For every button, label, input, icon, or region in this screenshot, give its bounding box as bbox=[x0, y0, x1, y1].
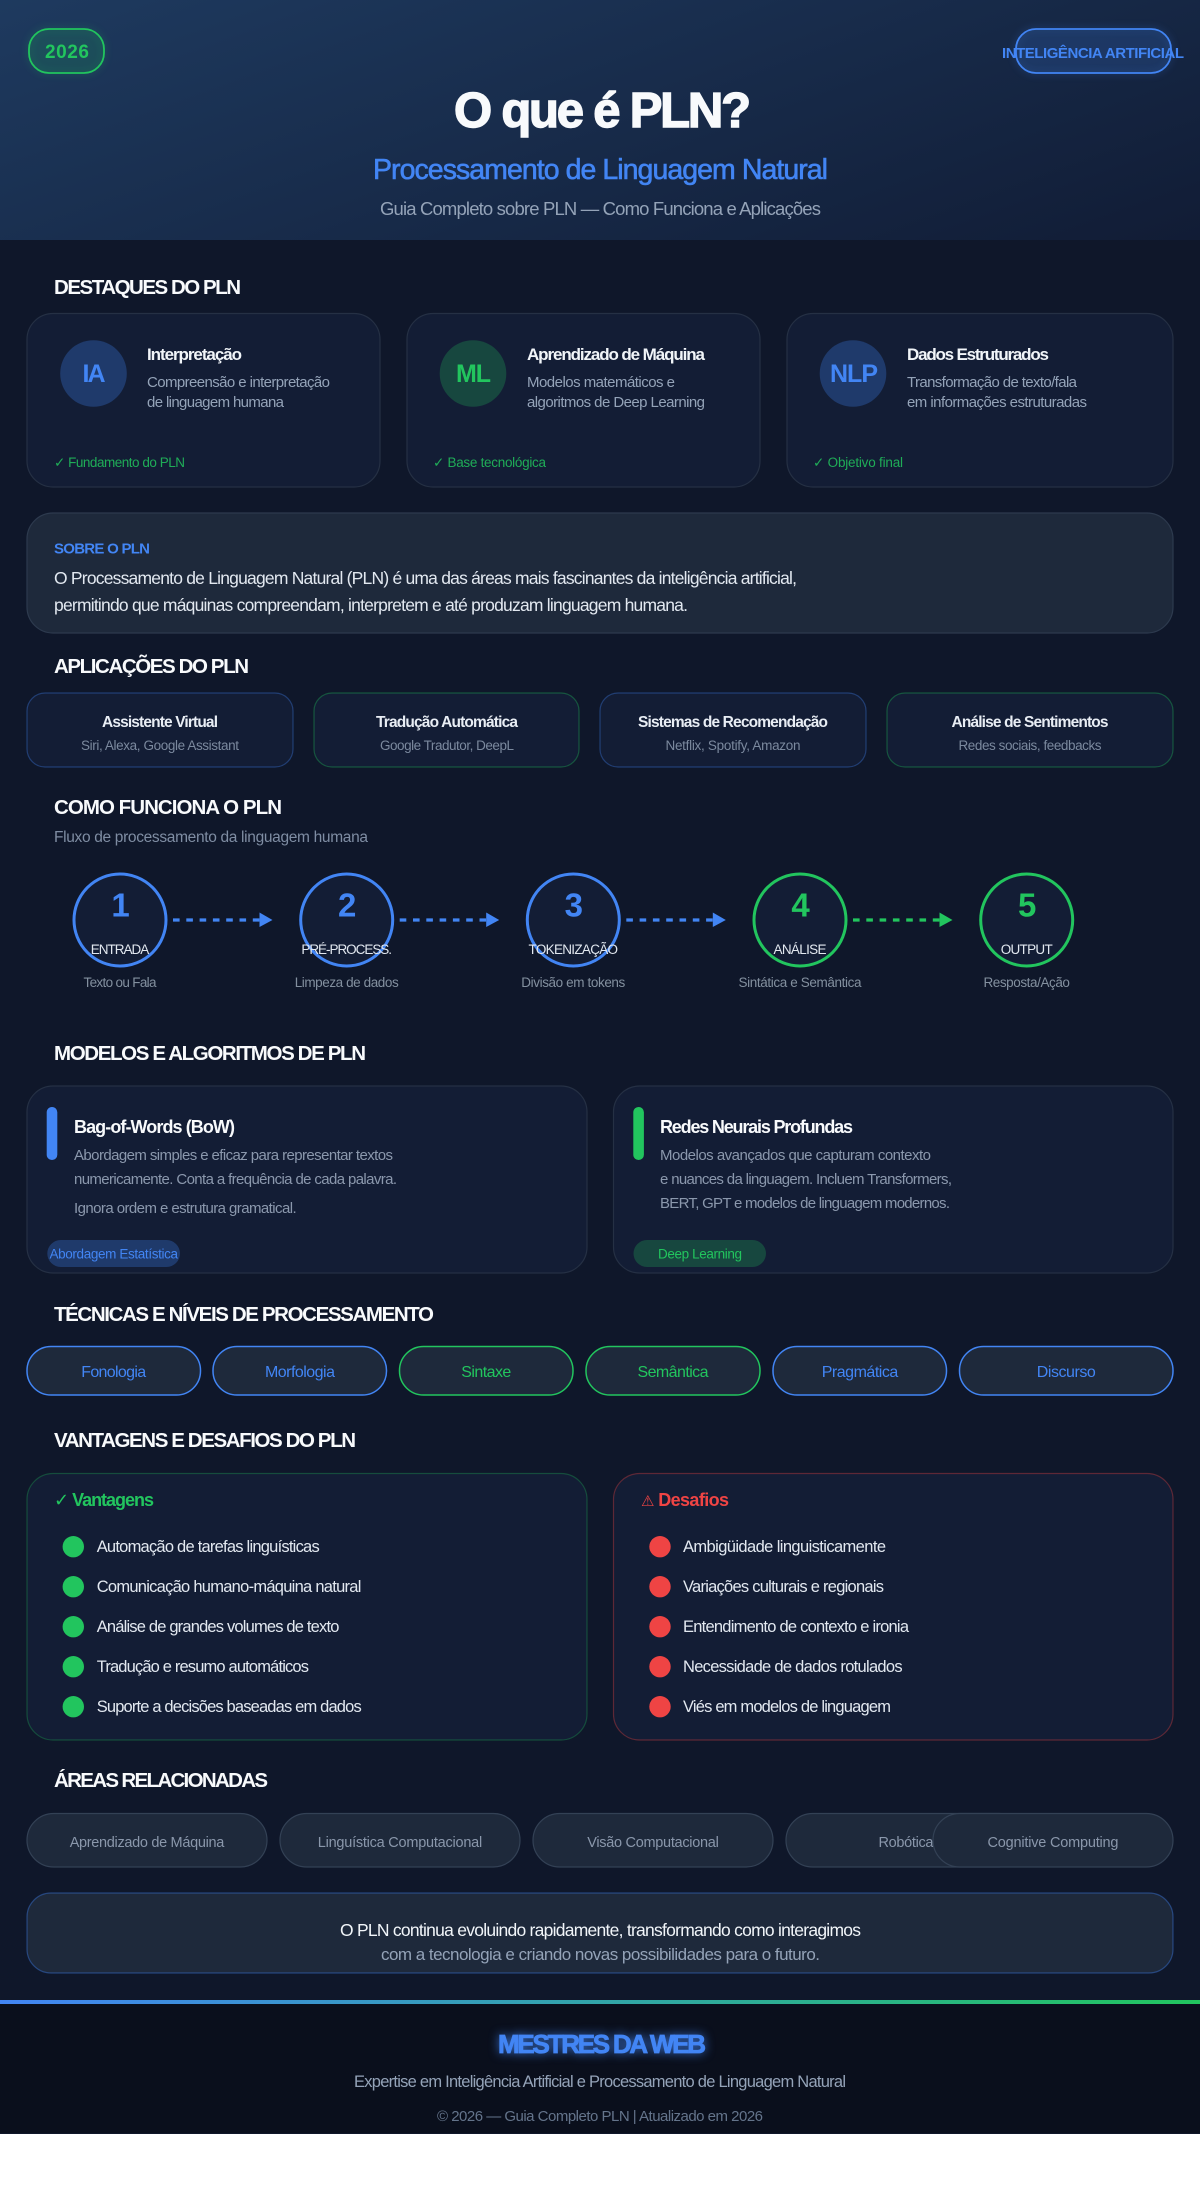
footer copyright: © 2026 — Guia Completo PLN | Atualizado em 2026 bbox=[437, 2108, 763, 2125]
panel: vantagens bbox=[27, 1474, 587, 1740]
footer description: Expertise em Inteligência Artificial e Processamento de Linguagem Natural bbox=[354, 2073, 846, 2091]
card: dados: NLP bbox=[830, 360, 878, 388]
step 1: 1 bbox=[111, 886, 130, 924]
heading: técnicas: TÉCNICAS E NÍVEIS DE PROCESSAMENTO bbox=[54, 1303, 434, 1326]
pill: visão computacional bbox=[533, 1814, 773, 1867]
card: bag-of-words: Ignora ordem e estrutura gramatical. bbox=[74, 1200, 297, 1217]
pill: sintaxe bbox=[400, 1346, 573, 1395]
highlight cards bbox=[27, 314, 1173, 487]
panel: sobre o PLN: O Processamento de Linguagem Natural (PLN) é uma das áreas mais fascinantes da inteligência artificial, bbox=[54, 568, 797, 588]
tagline: Guia Completo sobre PLN — Como Funciona e Aplicações bbox=[380, 198, 821, 219]
category badge bbox=[1002, 29, 1184, 73]
panel: desafios: ⚠ Desafios bbox=[641, 1490, 729, 1510]
pill: cognitive computing: Cognitive Computing bbox=[988, 1835, 1118, 1851]
step 1: ENTRADA bbox=[91, 942, 149, 957]
card: dados: ✓ Objetivo final bbox=[813, 455, 903, 470]
panel: sobre o PLN: SOBRE O PLN bbox=[54, 540, 150, 558]
step 5: 5 bbox=[1018, 886, 1036, 924]
card: sistemas de recomendação: Netflix, Spotify, Amazon bbox=[666, 738, 800, 753]
flow diagram bbox=[74, 874, 1073, 990]
year badge: 2026 bbox=[45, 42, 89, 63]
panel: vantagens: Automação de tarefas linguísticas bbox=[97, 1538, 320, 1556]
panel: vantagens: Comunicação humano-máquina natural bbox=[97, 1578, 361, 1596]
pill: pragmática: Pragmática bbox=[822, 1364, 898, 1381]
arrow 4 bbox=[853, 912, 952, 927]
footer brand: MESTRES DA WEB bbox=[498, 2029, 706, 2059]
panel: desafios: Entendimento de contexto e ironia bbox=[683, 1618, 910, 1636]
step 2: Limpeza de dados bbox=[295, 975, 399, 990]
panel: desafios: Ambigüidade linguisticamente bbox=[683, 1538, 886, 1556]
header bbox=[0, 0, 1200, 240]
card: sistemas de recomendação bbox=[600, 693, 866, 767]
step 3: 3 bbox=[565, 886, 583, 924]
card: redes neurais: Deep Learning bbox=[658, 1246, 742, 1262]
model cards bbox=[27, 1086, 1173, 1273]
step 5: OUTPUT bbox=[1001, 942, 1053, 957]
card: assistente virtual: Assistente Virtual bbox=[102, 714, 218, 731]
panel: sobre o PLN bbox=[27, 513, 1173, 633]
year badge bbox=[29, 29, 104, 73]
pill: cognitive computing bbox=[933, 1814, 1173, 1867]
step 4 bbox=[738, 874, 862, 990]
pill: visão computacional: Visão Computacional bbox=[587, 1835, 719, 1851]
closing callout: O PLN continua evoluindo rapidamente, transformando como interagimos bbox=[340, 1920, 861, 1940]
card: bag-of-words bbox=[27, 1086, 587, 1273]
card: dados: Dados Estruturados bbox=[907, 345, 1049, 364]
heading: como funciona: COMO FUNCIONA O PLN bbox=[54, 796, 282, 819]
pill: morfologia bbox=[213, 1346, 386, 1395]
step 5: Resposta/Ação bbox=[983, 975, 1070, 990]
pill: discurso bbox=[960, 1346, 1173, 1395]
card: interpretação: de linguagem humana bbox=[147, 394, 285, 411]
step 1 bbox=[74, 874, 166, 990]
card: aprendizado bbox=[407, 314, 760, 487]
card: redes neurais: Modelos avançados que capturam contexto bbox=[660, 1147, 931, 1164]
pill: linguística computacional bbox=[280, 1814, 520, 1867]
pill: semântica bbox=[586, 1346, 760, 1395]
arrow 3 bbox=[626, 912, 726, 927]
panel: desafios: Necessidade de dados rotulados bbox=[683, 1658, 903, 1676]
panel: vantagens: Análise de grandes volumes de texto bbox=[97, 1618, 339, 1636]
step 5 bbox=[981, 874, 1073, 990]
card: aprendizado: ✓ Base tecnológica bbox=[433, 455, 546, 470]
card: interpretação: Interpretação bbox=[147, 345, 242, 364]
pill: fonologia bbox=[27, 1346, 200, 1395]
card: dados bbox=[787, 314, 1173, 487]
card: aprendizado: ML bbox=[456, 360, 491, 388]
card: redes neurais bbox=[614, 1086, 1173, 1273]
application cards bbox=[27, 693, 1173, 767]
step 3: TOKENIZAÇÃO bbox=[529, 942, 618, 957]
closing callout bbox=[27, 1893, 1173, 1973]
panel: sobre o PLN: permitindo que máquinas compreendam, interpretem e até produzam linguagem humana. bbox=[54, 595, 688, 615]
closing callout: com a tecnologia e criando novas possibilidades para o futuro. bbox=[381, 1945, 820, 1964]
card: redes neurais: BERT, GPT e modelos de linguagem modernos. bbox=[660, 1195, 950, 1212]
heading: aplicações: APLICAÇÕES DO PLN bbox=[54, 654, 249, 678]
panel: vantagens: Suporte a decisões baseadas em dados bbox=[97, 1698, 362, 1716]
card: sistemas de recomendação: Sistemas de Recomendação bbox=[638, 714, 828, 731]
panel: vantagens: ✓ Vantagens bbox=[54, 1490, 154, 1510]
card: análise de sentimentos bbox=[887, 693, 1173, 767]
flow subtitle: Fluxo de processamento da linguagem humana bbox=[54, 829, 368, 846]
step 4: 4 bbox=[791, 886, 810, 924]
card: redes neurais: e nuances da linguagem. Incluem Transformers, bbox=[660, 1171, 952, 1188]
step 1: Texto ou Fala bbox=[84, 975, 157, 990]
card: aprendizado: Modelos matemáticos e bbox=[527, 374, 675, 391]
step 2: PRÉ-PROCESS. bbox=[301, 942, 392, 957]
heading: vantagens e desafios: VANTAGENS E DESAFIOS DO PLN bbox=[54, 1429, 356, 1452]
card: tradução automática: Tradução Automática bbox=[376, 714, 518, 731]
step 4: ANÁLISE bbox=[774, 942, 826, 957]
pill: pragmática bbox=[773, 1346, 946, 1395]
card: dados: Transformação de texto/fala bbox=[907, 374, 1078, 391]
card: bag-of-words: numericamente. Conta a frequência de cada palavra. bbox=[74, 1171, 397, 1188]
pill: sintaxe: Sintaxe bbox=[461, 1364, 511, 1381]
panel: desafios bbox=[614, 1474, 1173, 1740]
card: interpretação: ✓ Fundamento do PLN bbox=[54, 455, 185, 470]
panel: vantagens: Tradução e resumo automáticos bbox=[97, 1658, 309, 1676]
category badge: INTELIGÊNCIA ARTIFICIAL bbox=[1002, 44, 1184, 62]
technique pills bbox=[27, 1346, 1173, 1395]
pill: robótica: Robótica bbox=[878, 1835, 934, 1851]
pill: robótica bbox=[786, 1814, 1026, 1867]
step 3 bbox=[521, 874, 626, 990]
arrow 2 bbox=[400, 912, 499, 927]
card: interpretação: Compreensão e interpretação bbox=[147, 374, 330, 391]
card: análise de sentimentos: Redes sociais, feedbacks bbox=[958, 738, 1102, 753]
card: análise de sentimentos: Análise de Sentimentos bbox=[952, 714, 1108, 731]
card: dados: em informações estruturadas bbox=[907, 394, 1087, 411]
heading: modelos: MODELOS E ALGORITMOS DE PLN bbox=[54, 1042, 366, 1065]
footer bbox=[0, 2000, 1200, 2133]
card: aprendizado: Aprendizado de Máquina bbox=[527, 345, 706, 364]
panel: desafios: Viés em modelos de linguagem bbox=[683, 1698, 891, 1716]
card: aprendizado: algoritmos de Deep Learning bbox=[527, 394, 705, 411]
panel: desafios: Variações culturais e regionais bbox=[683, 1578, 884, 1596]
card: assistente virtual: Siri, Alexa, Google Assistant bbox=[81, 738, 239, 753]
card: interpretação: IA bbox=[82, 360, 106, 388]
step 2: 2 bbox=[338, 886, 356, 924]
pill: morfologia: Morfologia bbox=[265, 1364, 335, 1381]
heading: destaques: DESTAQUES DO PLN bbox=[54, 276, 241, 299]
card: redes neurais: Redes Neurais Profundas bbox=[660, 1117, 853, 1137]
step 3: Divisão em tokens bbox=[521, 975, 626, 990]
step 4: Sintática e Semântica bbox=[738, 975, 862, 990]
arrow 1 bbox=[173, 912, 272, 927]
heading: áreas relacionadas: ÁREAS RELACIONADAS bbox=[54, 1769, 268, 1792]
card: tradução automática: Google Tradutor, DeepL bbox=[380, 738, 514, 753]
pill: discurso: Discurso bbox=[1037, 1364, 1096, 1381]
subtitle: Processamento de Linguagem Natural bbox=[373, 154, 828, 186]
card: interpretação bbox=[27, 314, 380, 487]
pill: semântica: Semântica bbox=[638, 1364, 709, 1381]
card: tradução automática bbox=[314, 693, 579, 767]
title: O que é PLN? bbox=[454, 84, 751, 138]
pill: fonologia: Fonologia bbox=[81, 1364, 146, 1381]
pill: aprendizado de máquina bbox=[27, 1814, 267, 1867]
card: bag-of-words: Bag-of-Words (BoW) bbox=[74, 1117, 235, 1137]
card: bag-of-words: Abordagem simples e eficaz para representar textos bbox=[74, 1147, 393, 1164]
step 2 bbox=[295, 874, 399, 990]
card: assistente virtual bbox=[27, 693, 293, 767]
pill: linguística computacional: Linguística Computacional bbox=[318, 1835, 482, 1851]
card: bag-of-words: Abordagem Estatística bbox=[50, 1246, 178, 1262]
pill: aprendizado de máquina: Aprendizado de Máquina bbox=[70, 1835, 225, 1851]
related area pills bbox=[27, 1814, 1173, 1867]
